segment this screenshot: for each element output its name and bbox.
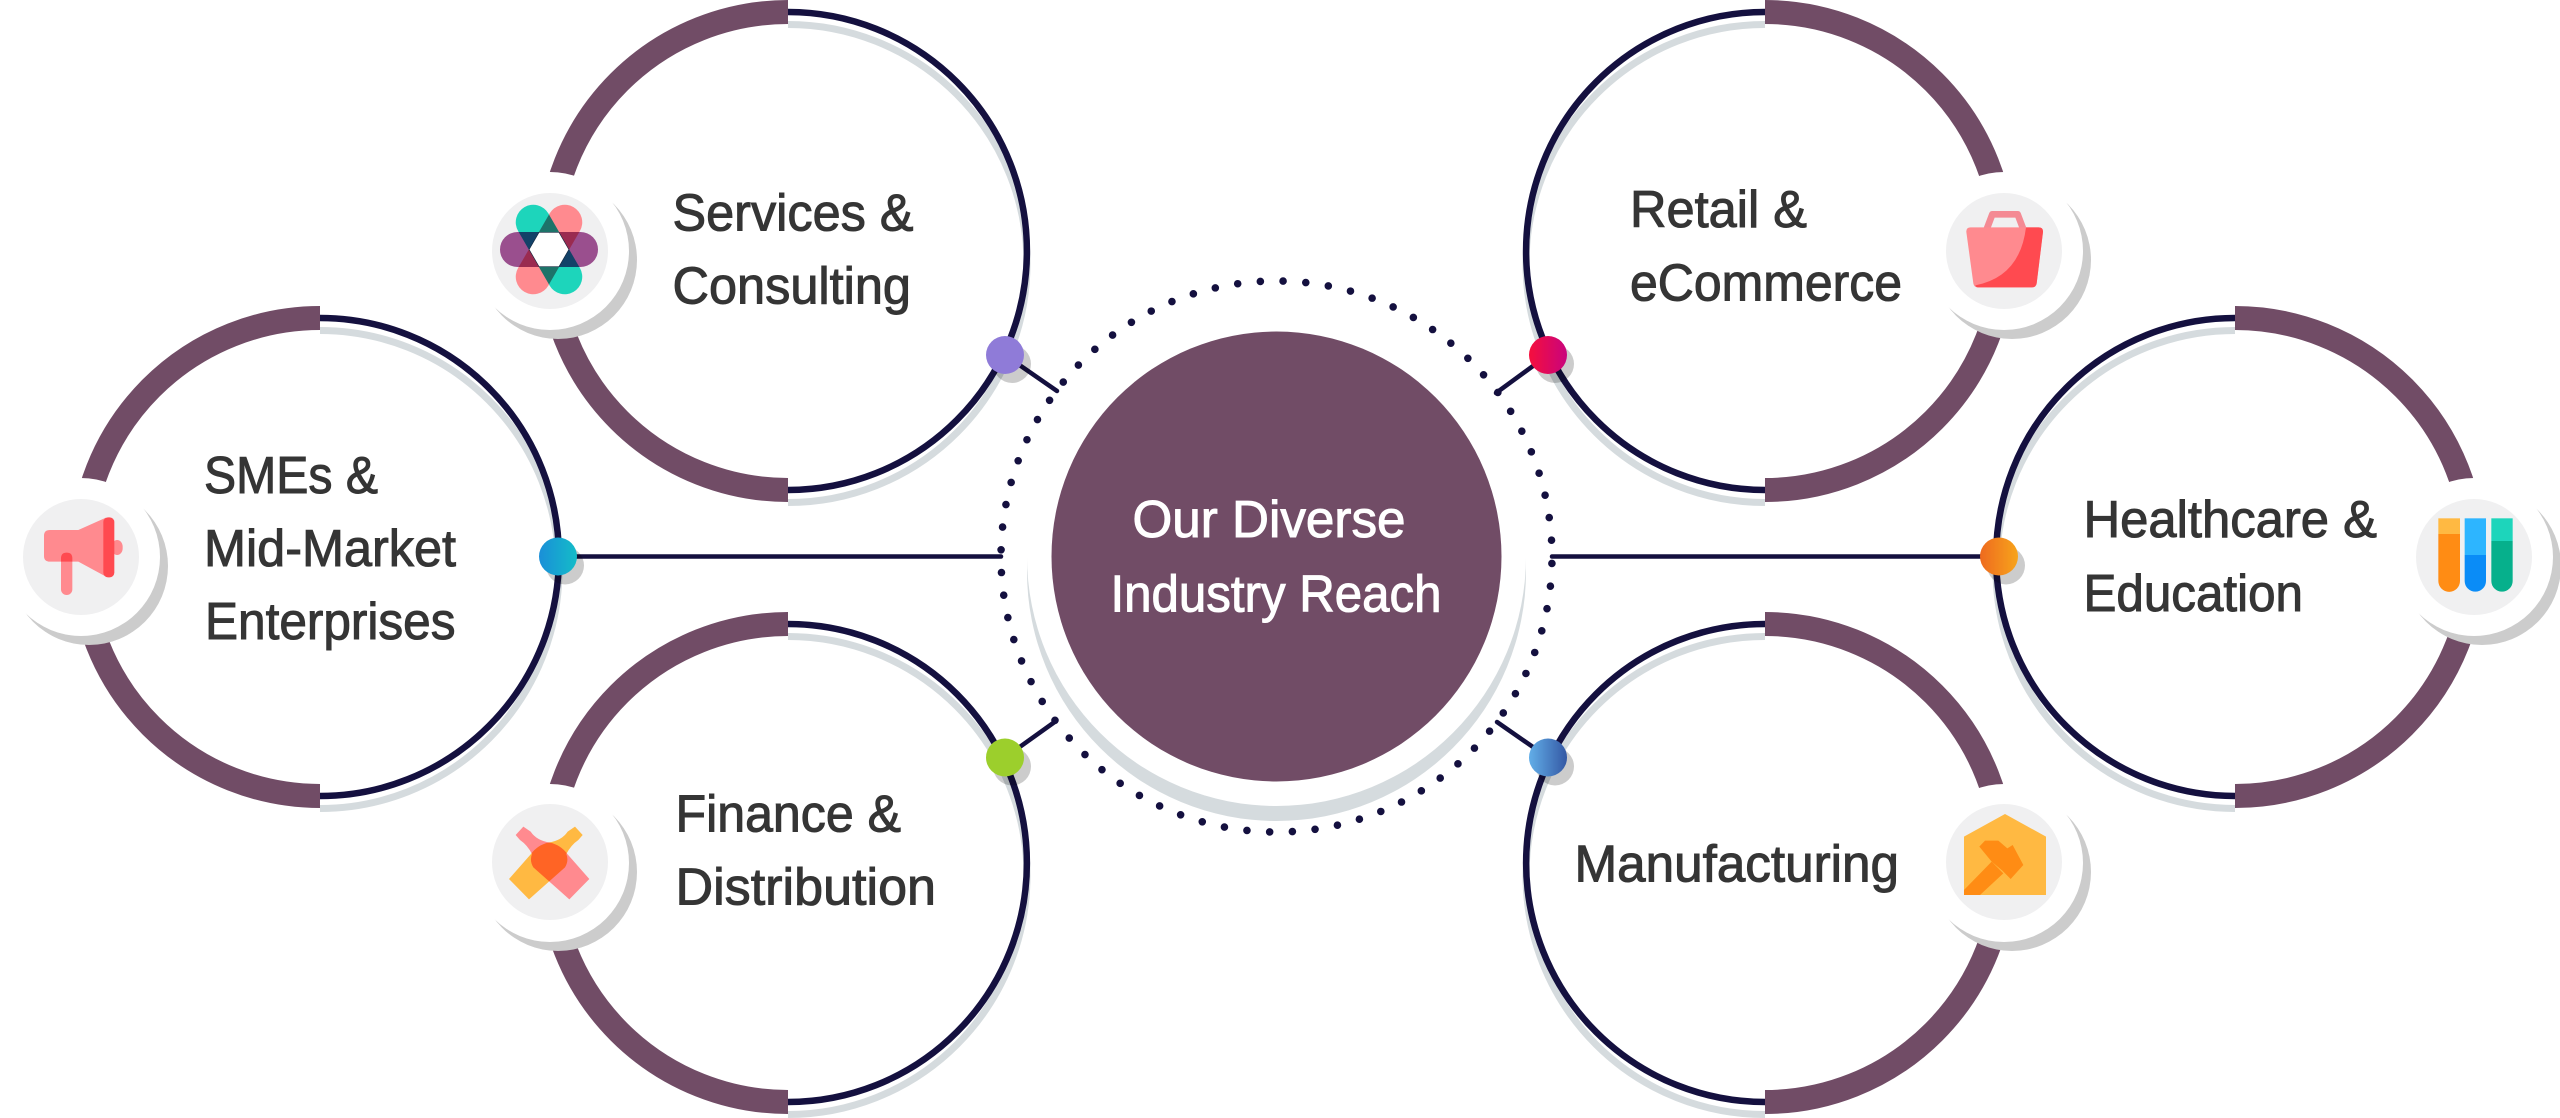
node dot	[1980, 538, 2025, 584]
icon: shopping bag	[1925, 172, 2091, 339]
connector: Retail to hub	[1496, 355, 1548, 393]
connector: SMEs to hub	[561, 554, 1001, 559]
panel: Manufacturing	[1526, 624, 2091, 1114]
ring	[1996, 318, 2474, 808]
ring	[549, 12, 1027, 502]
ring	[1526, 12, 2004, 502]
connector: Manufacturing to hub	[1497, 722, 1548, 758]
panel: SMEs & Mid-Market Enterprises	[2, 318, 584, 808]
connector: Services to hub	[1005, 355, 1057, 391]
label: Healthcare &	[2084, 491, 2377, 549]
hub disc	[1052, 332, 1502, 782]
hub title	[1110, 491, 1442, 624]
label: Consulting	[672, 258, 911, 316]
icon: test tubes	[2395, 478, 2560, 645]
label	[676, 786, 936, 916]
panel: Healthcare & Education	[1980, 318, 2560, 808]
connector: Finance to hub	[1005, 721, 1056, 758]
node dot	[1529, 336, 1574, 383]
label	[204, 447, 457, 651]
label: Services &	[672, 184, 914, 242]
hub title: Our Diverse	[1132, 491, 1406, 549]
node dot	[1529, 738, 1574, 786]
panel: Retail & eCommerce	[1526, 12, 2091, 502]
node dot	[986, 738, 1031, 786]
label: Finance &	[676, 786, 901, 844]
label	[1630, 181, 1902, 312]
label: eCommerce	[1630, 254, 1902, 312]
ring	[549, 624, 1027, 1114]
icon: house with hammer	[1925, 784, 2091, 951]
panel: Finance & Distribution	[471, 624, 1031, 1114]
hub white ring	[1027, 307, 1526, 806]
icon: megaphone	[2, 478, 168, 645]
label: Enterprises	[205, 593, 456, 651]
label: Distribution	[676, 858, 936, 916]
icon: crossed bottles	[471, 784, 637, 951]
label: Education	[2084, 565, 2303, 623]
icon: hexagon flower	[471, 172, 637, 339]
label: Manufacturing	[1574, 836, 1899, 894]
label: Retail &	[1630, 181, 1807, 239]
ring	[81, 318, 559, 808]
hub shadow	[1027, 322, 1526, 821]
label: Mid-Market	[204, 520, 457, 578]
label	[672, 184, 914, 316]
dotted ring	[1001, 281, 1552, 832]
hub title: Industry Reach	[1110, 566, 1442, 624]
label	[2084, 491, 2377, 623]
panel: Services & Consulting	[471, 12, 1031, 502]
ring	[1526, 624, 2004, 1114]
label: SMEs &	[204, 447, 378, 505]
node dot	[986, 336, 1031, 383]
panel: central hub	[1001, 281, 1552, 832]
node dot	[539, 538, 584, 584]
connector: Healthcare to hub	[1552, 554, 1993, 559]
